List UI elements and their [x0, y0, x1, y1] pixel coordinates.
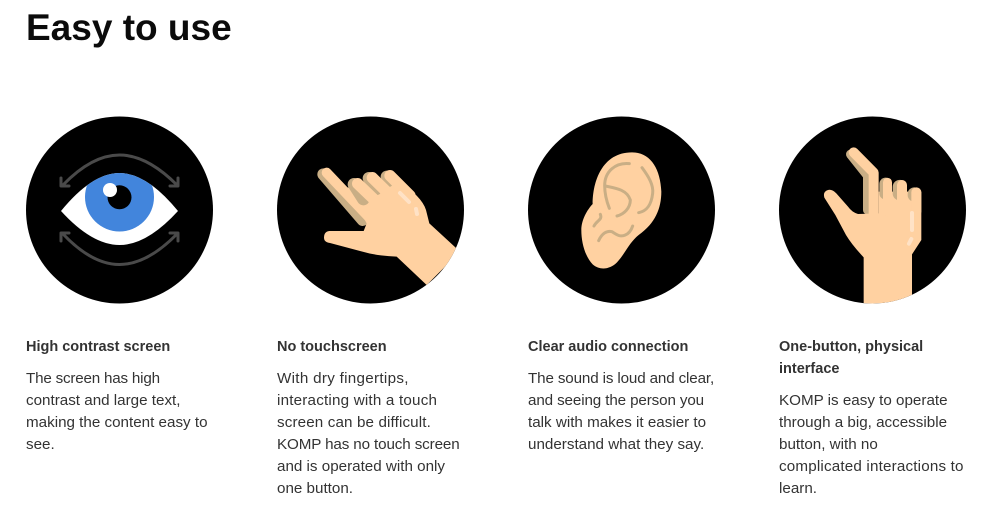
icon: eye: [26, 116, 213, 304]
column: no touchscreen: interacting with a touch: [277, 392, 437, 409]
column: one-button interface: complicated interactions to: [779, 458, 964, 475]
column: high contrast screen: see.: [26, 436, 55, 453]
column: high contrast screen: The screen has high: [26, 370, 160, 387]
column: clear audio connection: and seeing the person you: [528, 392, 704, 409]
column: one-button interface: KOMP is easy to operate: [779, 392, 948, 409]
column: clear audio connection: [528, 339, 714, 453]
column: clear audio connection: understand what they say.: [528, 436, 704, 453]
column: one-button interface: One-button, physical: [779, 339, 923, 355]
icons row: [26, 116, 966, 304]
column: one-button interface: learn.: [779, 480, 817, 497]
title: Easy to use: [26, 7, 232, 48]
column: high contrast screen: High contrast screen: [26, 339, 170, 355]
column: clear audio connection: talk with makes it easier to: [528, 414, 706, 431]
column: no touchscreen: With dry fingertips,: [277, 370, 409, 387]
column: no touchscreen: screen can be difficult.: [277, 414, 431, 431]
column: one-button interface: [779, 339, 964, 497]
column: one-button interface: through a big, accessible: [779, 414, 947, 431]
column: high contrast screen: [26, 339, 208, 453]
column: no touchscreen: and is operated with only: [277, 458, 445, 475]
icon: pointing hand: [277, 116, 464, 304]
column: no touchscreen: No touchscreen: [277, 339, 387, 355]
icon: raised finger hand: [779, 116, 966, 305]
column: clear audio connection: Clear audio connection: [528, 339, 688, 355]
column: high contrast screen: making the content easy to: [26, 414, 208, 431]
column: one-button interface: button, with no: [779, 436, 878, 453]
column: high contrast screen: contrast and large text,: [26, 392, 180, 409]
column: no touchscreen: KOMP has no touch screen: [277, 436, 460, 453]
column: no touchscreen: [277, 339, 460, 497]
icon: ear: [528, 116, 715, 304]
column: clear audio connection: The sound is loud and clear,: [528, 370, 714, 387]
column: no touchscreen: one button.: [277, 480, 353, 497]
column: one-button interface: interface: [779, 361, 839, 377]
